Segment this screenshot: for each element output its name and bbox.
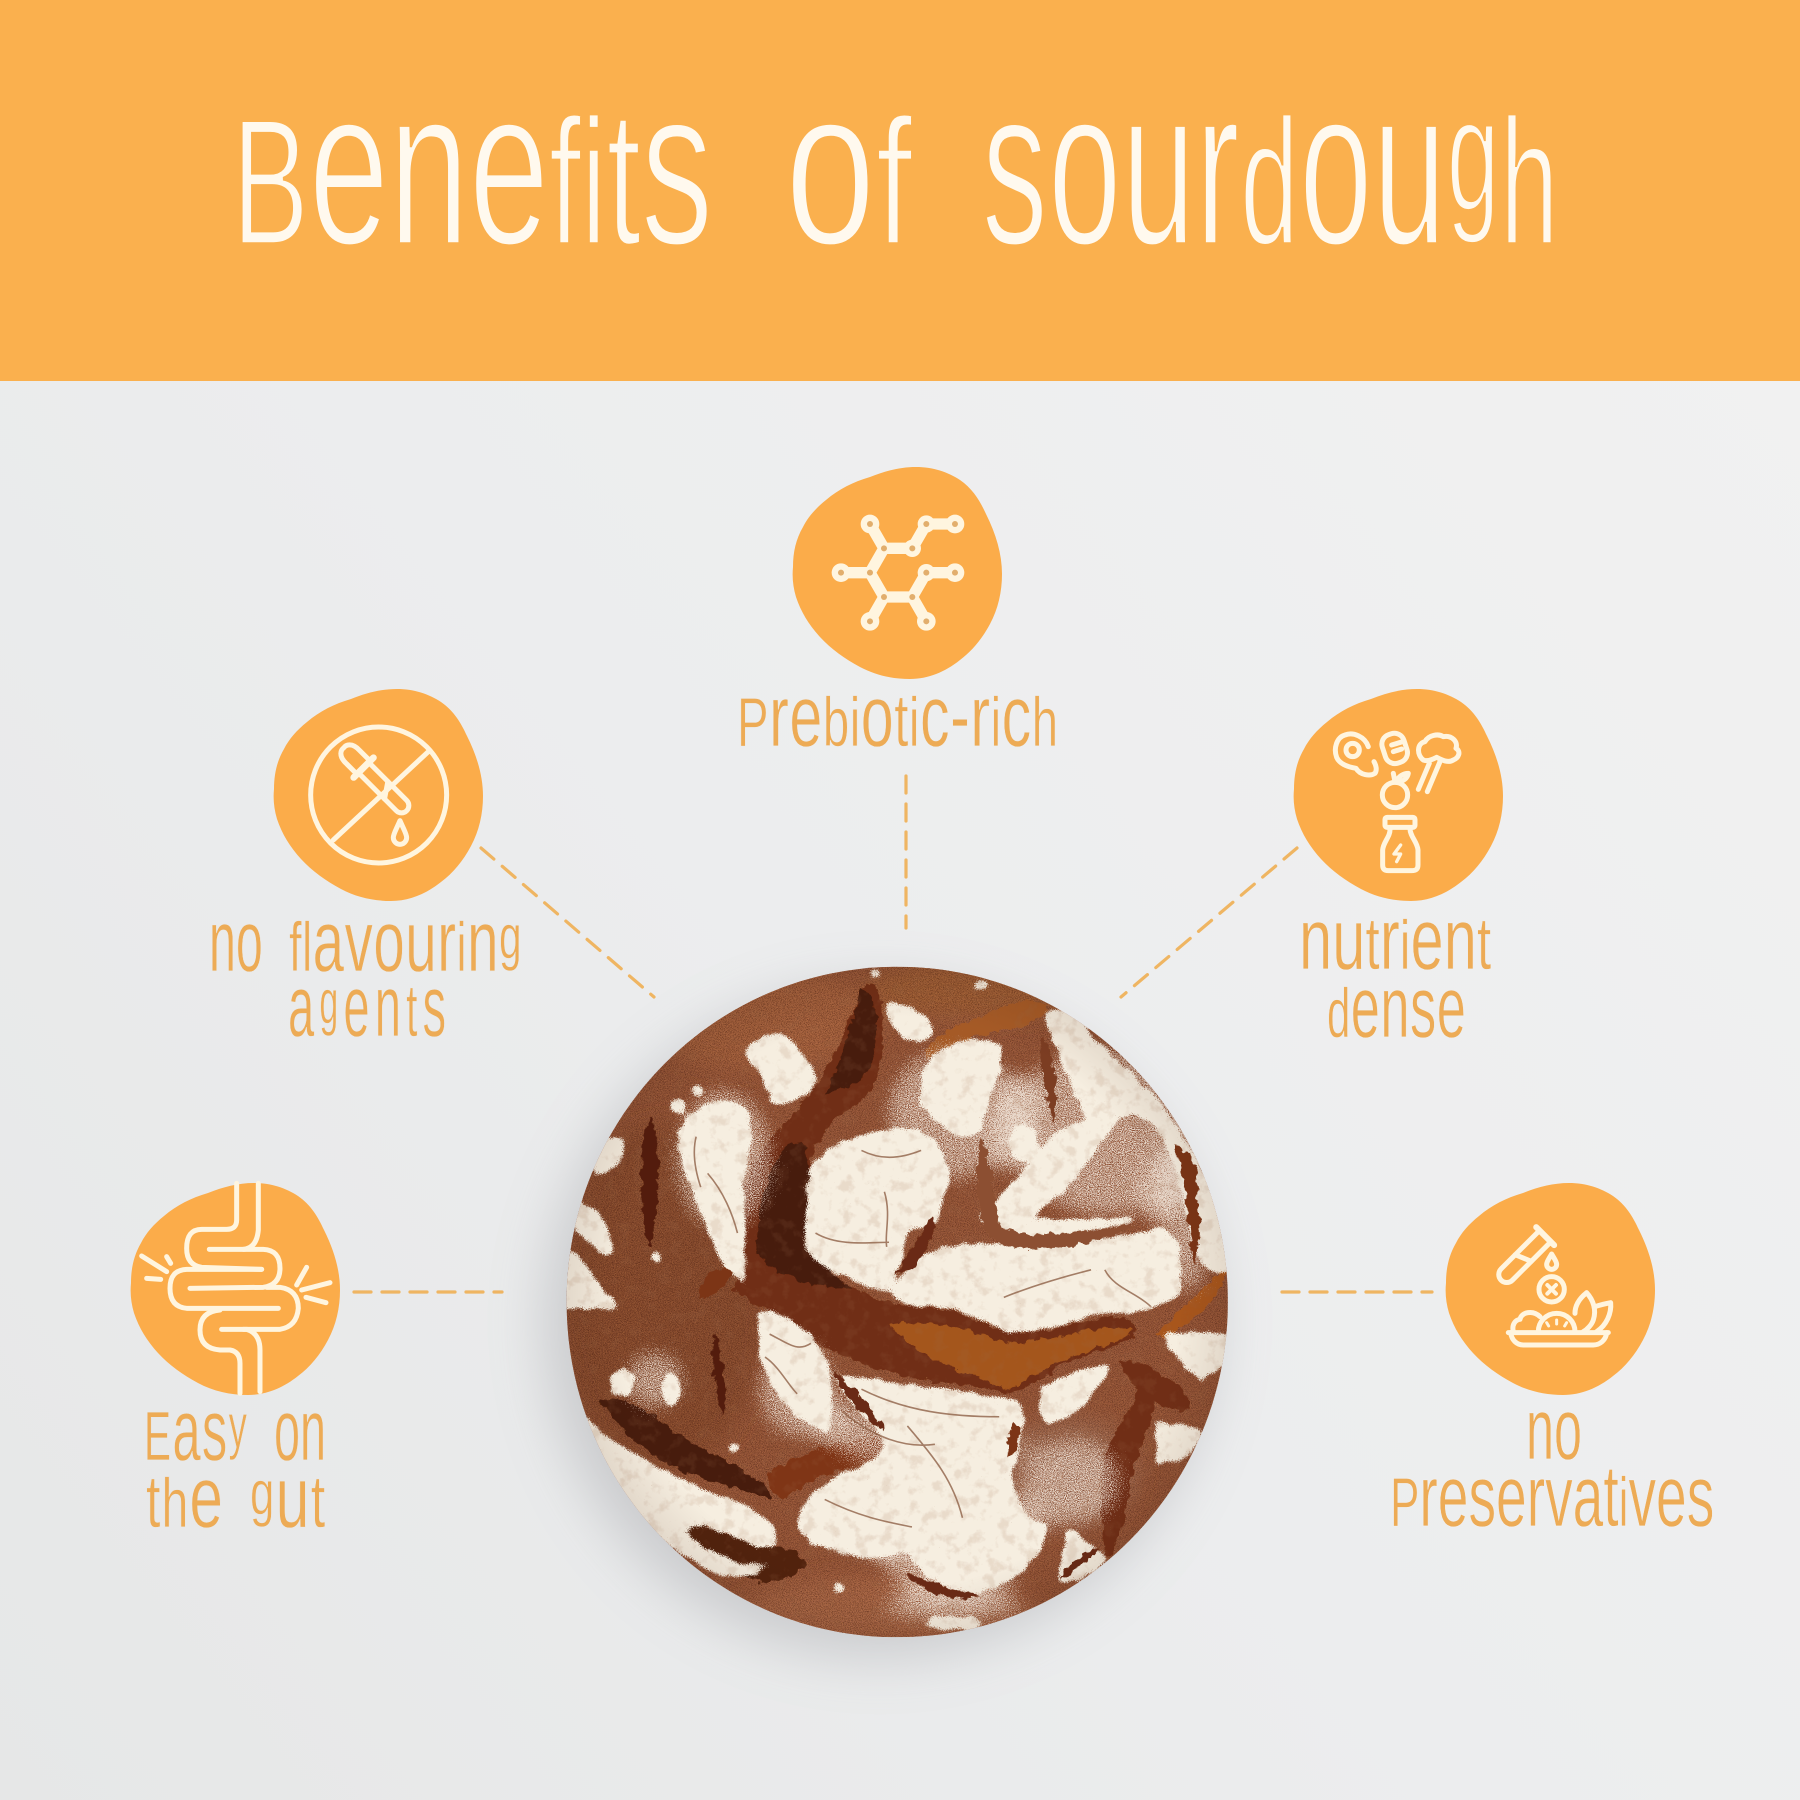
label: nutrient dense: dense: [1327, 960, 1466, 1056]
title: of: [785, 40, 912, 292]
label: no flavouring agents: g: [499, 902, 522, 972]
rim shading: [567, 967, 1228, 1637]
item: nutrient dense: [1294, 689, 1503, 1056]
title: sourdou: [982, 41, 1446, 293]
crevices: slits over flour: [641, 1036, 1200, 1599]
label: easy on the gut: u: [276, 1448, 309, 1546]
item: no flavouring agents: [209, 689, 522, 1055]
label: easy on the gut: on: [274, 1382, 326, 1479]
label: no flavouring agents: ts: [406, 958, 446, 1055]
blob: prebiotic: [793, 467, 1002, 679]
icon: molecule: [832, 515, 964, 631]
crevices: main: [602, 983, 1225, 1582]
connector: prebiotic to bread: [904, 776, 908, 928]
label: easy on the gut: g: [250, 1458, 274, 1528]
icon: foods and supplement jar: [1335, 731, 1459, 871]
flour mottling: [568, 968, 1226, 1630]
bread shadow: [545, 987, 1215, 1657]
label: nutrient dense: nutrient: [1299, 891, 1491, 988]
header band: [0, 0, 1800, 381]
label: no flavouring agents: en: [343, 958, 401, 1055]
label: no preservatives: [1390, 1382, 1714, 1545]
crust tonal patches: [563, 962, 1137, 1642]
label: no preservatives: no: [1526, 1382, 1582, 1479]
blob: no preservatives: [1446, 1183, 1655, 1395]
label: no flavouring agents: a: [288, 958, 314, 1055]
title: g: [1447, 65, 1499, 246]
label: no flavouring agents: g: [319, 966, 338, 1037]
label: easy on the gut: the: [146, 1448, 223, 1546]
label: no preservatives: Preservatives: [1390, 1448, 1714, 1545]
sourdough loaf: [566, 966, 1228, 1638]
title: [232, 40, 1558, 293]
icon: intestines: [142, 1183, 330, 1393]
crust base: [566, 966, 1228, 1638]
label: easy on the gut: t: [311, 1460, 325, 1543]
label: easy on the gut: Eas: [144, 1383, 227, 1480]
label: easy on the gut: [144, 1382, 326, 1546]
label: no flavouring agents: no: [209, 892, 263, 990]
label: prebiotic-rich: Prebiotic-rich: [737, 668, 1058, 765]
label: no flavouring agents: flavourin: [289, 893, 499, 990]
blob: easy on the gut: [131, 1183, 340, 1395]
connector: nutrient to bread: [1121, 848, 1297, 997]
icon: test tube and food plate: [1492, 1227, 1611, 1345]
label: easy on the gut: y: [229, 1391, 247, 1460]
connector: flavouring to bread: [481, 848, 654, 997]
item: easy on the gut: [131, 1183, 340, 1546]
fine flour cracks: [694, 1137, 1151, 1527]
label: nutrient dense: [1299, 891, 1491, 1056]
connector: gut to bread: [354, 1290, 502, 1294]
flour dust: [613, 1036, 1224, 1633]
blob: nutrient: [1294, 689, 1503, 901]
icon: crossed-out dropper: [311, 727, 447, 863]
item: prebiotic-rich: [737, 467, 1058, 765]
label: no flavouring agents: [209, 892, 522, 1055]
crust grain: [566, 966, 1228, 1637]
title: h: [1500, 83, 1558, 283]
title: Benefits: [232, 42, 713, 293]
flour patches: [558, 969, 1238, 1632]
connector: preservatives to bread: [1282, 1290, 1432, 1294]
item: no preservatives: [1390, 1183, 1714, 1545]
blob: no flavouring: [274, 689, 483, 901]
